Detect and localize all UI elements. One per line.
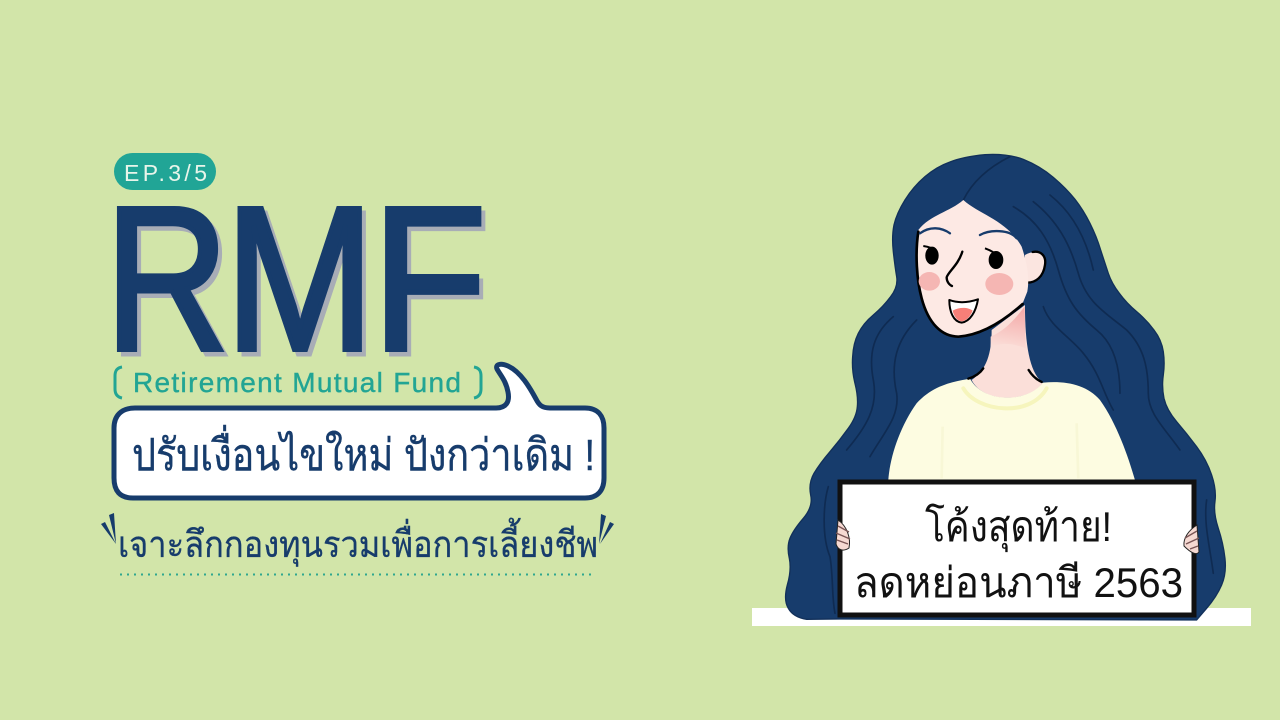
tagline: เจาะลึกกองทุนรวมเพื่อการเลี้ยงชีพ (118, 517, 598, 567)
dotted underline (120, 574, 593, 576)
eyebrows (920, 228, 1017, 238)
right hand (1184, 525, 1199, 554)
jaw line (917, 232, 1023, 337)
speech bubble (114, 364, 604, 498)
subtitle: Retirement Mutual Fund: Retirement Mutual Fund (133, 367, 461, 398)
face (916, 200, 1028, 337)
title: RMF (105, 164, 491, 399)
illustration: woman holding sign (786, 154, 1225, 620)
nose (947, 252, 962, 286)
right tick marks (599, 514, 614, 544)
neck (972, 305, 1043, 398)
sign board (840, 482, 1194, 615)
mouth (949, 299, 978, 323)
title: RMF: F (372, 164, 487, 393)
episode badge: EP.3/5 (124, 160, 207, 186)
title: RMF: M (225, 164, 374, 393)
ear (1025, 252, 1045, 283)
sweater collar (963, 388, 1047, 408)
sweater sleeves (942, 423, 1078, 478)
left tick marks (101, 513, 116, 544)
episode badge (114, 153, 216, 190)
sign board: ลดหย่อนภาษี 2563 (854, 559, 1183, 606)
sign board: โค้งสุดท้าย! (925, 502, 1112, 553)
title: RMF: F (376, 168, 491, 398)
neck outline (968, 368, 1042, 382)
hair (786, 154, 1225, 620)
left hand (836, 520, 850, 550)
title: RMF: R (105, 165, 229, 394)
white ground strip (752, 608, 1251, 626)
cheeks (919, 272, 1013, 295)
title: RMF: M (229, 169, 378, 398)
eyes (923, 246, 1003, 269)
sweater (888, 379, 1135, 480)
hair strands (824, 157, 1213, 613)
neck shadow (991, 307, 1026, 348)
title: RMF: R (109, 169, 233, 399)
speech bubble: ปรับเงื่อนไขใหม่ ปังกว่าเดิม ! (132, 424, 595, 480)
